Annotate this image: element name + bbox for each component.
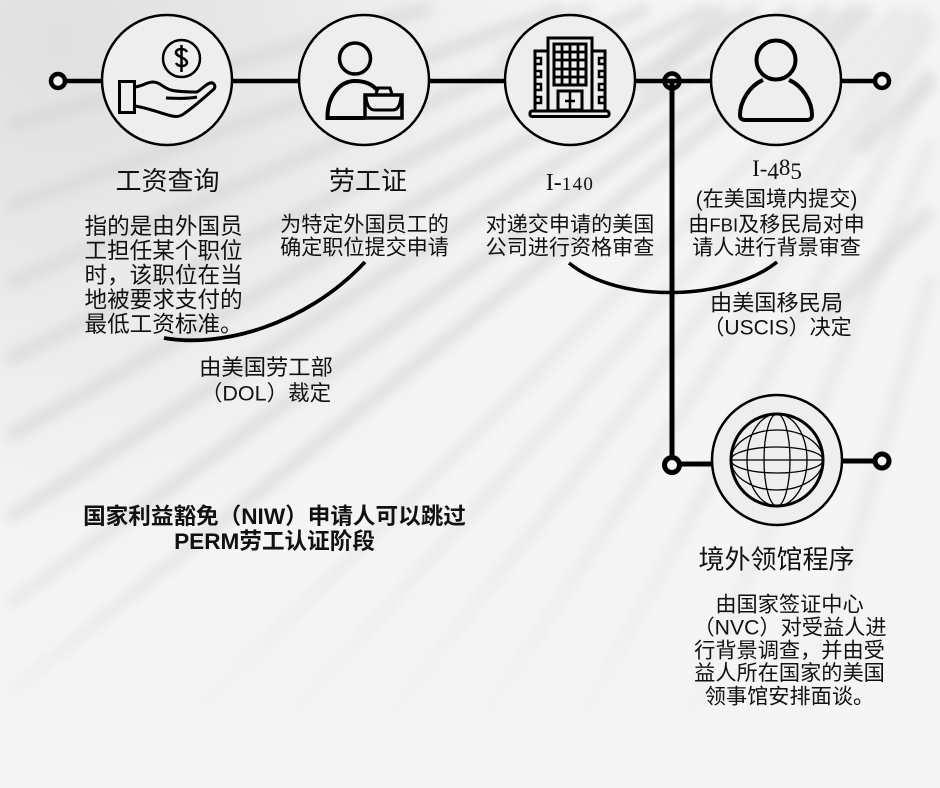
text: wage description: 指的是由外国员 <box>84 214 243 239</box>
text: consular description: 由国家签证中心 <box>715 592 864 616</box>
node: timeline branch <box>664 74 680 88</box>
text: I-485 description <box>688 187 865 260</box>
icon: office building <box>505 15 635 145</box>
text: wage description: 最低工资标准。 <box>84 312 243 337</box>
text: wage description: 地被要求支付的 <box>84 288 243 312</box>
text: consular description: （NVC）对受益人进 <box>693 616 887 640</box>
label: determined by DOL: 由美国劳工部 <box>199 355 333 380</box>
text: consular description <box>693 592 887 708</box>
note: NIW exemption: PERM劳工认证阶段 <box>174 528 375 554</box>
heading: I-485: 4 <box>767 159 779 184</box>
heading: I-485: 5 <box>790 159 802 184</box>
node: timeline start <box>51 74 65 88</box>
timeline: connecting lines <box>58 81 882 465</box>
curve: DOL bracket <box>164 262 365 340</box>
heading: consular processing: 境外领馆程序 <box>698 544 855 574</box>
text: consular description: 领事馆安排面谈。 <box>705 684 874 708</box>
curve: USCIS bracket <box>569 262 777 293</box>
text: I-485 description: (在美国境内提交) <box>696 187 857 211</box>
text: wage description: 时，该职位在当 <box>84 263 243 288</box>
text: I-140 description <box>486 212 654 260</box>
node: branch corner <box>664 458 680 472</box>
note: NIW exemption <box>83 503 466 554</box>
heading: I-485: I- <box>752 156 767 181</box>
label: decided by USCIS: 由美国移民局 <box>710 290 843 316</box>
text: consular description: 行背景调查，并由受 <box>694 638 885 662</box>
text: I-485 description: 由FBI及移民局对申 <box>688 212 865 236</box>
heading: wage inquiry: 工资查询 <box>115 166 220 196</box>
node: timeline end <box>875 74 889 88</box>
heading: I-140: I-140 <box>546 170 594 196</box>
icon: hand with dollar coin <box>102 15 232 145</box>
text: labor certification description: 为特定外国员工的 <box>280 212 449 236</box>
text: wage description: 工担任某个职位 <box>84 238 243 264</box>
text: consular description: 益人所在国家的美国 <box>694 661 885 685</box>
icon: globe <box>712 395 842 525</box>
note: NIW exemption: 国家利益豁免（NIW）申请人可以跳过 <box>83 503 466 529</box>
label: decided by USCIS: （USCIS）决定 <box>703 316 852 340</box>
icon: person <box>711 15 841 145</box>
label: decided by USCIS <box>703 290 852 340</box>
label: determined by DOL: （DOL）裁定 <box>201 382 331 406</box>
icon: employee with briefcase <box>299 15 429 145</box>
text: I-140 description: 公司进行资格审查 <box>486 236 654 260</box>
text: labor certification description <box>280 212 449 260</box>
node: branch end <box>875 454 889 468</box>
text: labor certification description: 确定职位提交申请 <box>280 236 449 260</box>
text: wage description <box>84 214 243 337</box>
heading: labor certification: 劳工证 <box>329 166 407 196</box>
label: determined by DOL <box>199 355 333 406</box>
text: I-140 description: 对递交申请的美国 <box>486 212 654 236</box>
text: I-485 description: 请人进行背景审查 <box>692 236 861 260</box>
heading: I-485: 8 <box>779 155 790 180</box>
